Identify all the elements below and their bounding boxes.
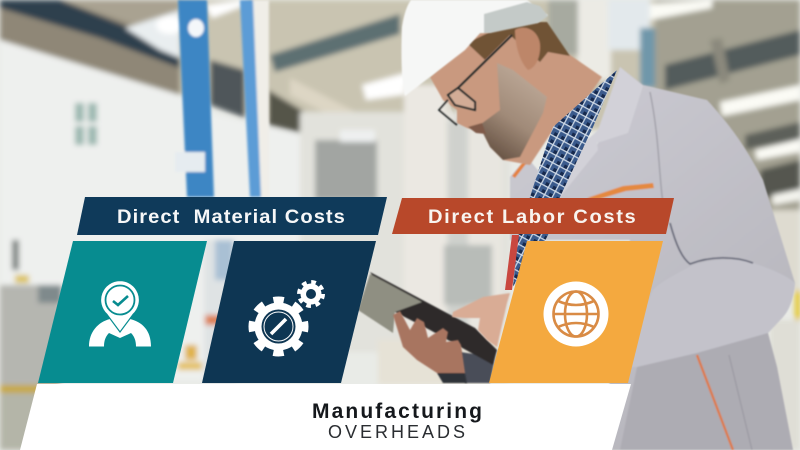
panel: bottom white title band [20,384,631,450]
red lanyard stripe [505,235,519,290]
lab coat [510,67,795,450]
tablet [358,272,497,383]
subtitle: OVERHEADS [328,422,465,442]
banner: direct material costs: Direct Material Costs [117,207,345,228]
banner: direct labor costs: Direct Labor Costs [428,207,636,228]
collared check shirt [513,70,617,287]
panel: orange globe [489,241,663,383]
panel: navy gears [202,241,376,383]
icon: person with location check pin [89,280,151,346]
panel: teal person-pin [38,241,207,383]
neck and head [430,22,602,165]
icon: gears [252,282,323,353]
title: Manufacturing [312,400,482,423]
icon: globe [544,282,608,346]
banner: direct labor costs [392,198,674,234]
hard hat [401,0,548,96]
hands holding tablet [393,293,510,383]
blue steel columns [175,0,269,197]
glasses [439,35,512,125]
worker figure [358,0,795,450]
banner: direct material costs [77,197,387,235]
